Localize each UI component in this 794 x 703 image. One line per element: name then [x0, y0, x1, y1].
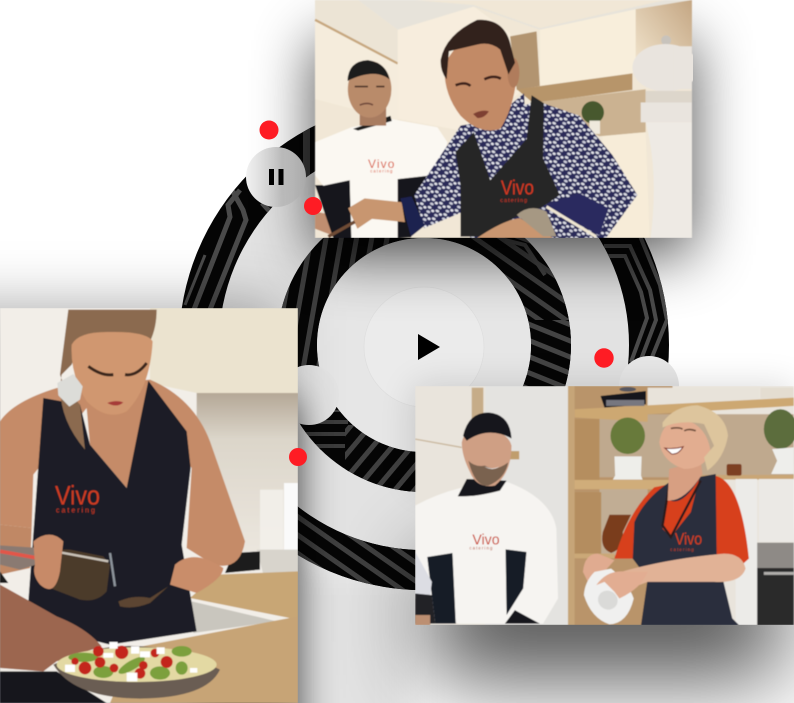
outer striped ring [182, 125, 669, 590]
concentric rings graphic [170, 100, 680, 600]
chef apron logo small: Vivo [368, 157, 395, 171]
man in patterned shirt [328, 20, 637, 238]
woman apron logo [670, 530, 702, 552]
chef logo: Vivo [472, 533, 500, 549]
brown jug [602, 515, 631, 553]
red dots [260, 120, 614, 466]
wooden shelving [568, 386, 794, 625]
woman apron logo: catering [670, 547, 695, 552]
jar with seeds [0, 545, 115, 600]
inner play circle [364, 287, 484, 407]
small circle lower left [279, 365, 339, 425]
photo: two chefs, man in patterned shirt [314, 0, 693, 238]
pause icon [269, 169, 284, 185]
kitchen roll and bowl [225, 483, 298, 576]
apron logo: catering [500, 198, 528, 204]
plant in white pot [610, 418, 645, 480]
inner disc [317, 238, 531, 452]
left hand [33, 535, 63, 589]
small brown cup [727, 464, 742, 476]
play icon [418, 334, 440, 360]
pot on shelf [601, 387, 646, 408]
pepper mill [632, 35, 699, 238]
apron logo: Vivo [55, 481, 100, 511]
chef logo: catering [469, 546, 493, 551]
pause button circle [246, 147, 306, 207]
helping hand [0, 585, 102, 671]
hair [60, 310, 157, 450]
quiche in tart tin [53, 642, 220, 699]
photo: woman sprinkling seeds on a quiche [0, 308, 298, 703]
photo: smiling chef and woman with bowl [415, 386, 794, 625]
earring [57, 374, 83, 407]
apron logo: Vivo [501, 176, 534, 199]
chef in background [315, 60, 447, 238]
smiling chef [415, 413, 558, 625]
plant on shelf [582, 101, 604, 134]
band between rings [219, 140, 629, 550]
small circle right [619, 356, 679, 416]
woman [0, 310, 245, 645]
white bowl [584, 569, 648, 624]
woman apron logo: Vivo [675, 530, 702, 549]
chef apron logo small: catering [370, 169, 393, 174]
plant right [764, 409, 794, 474]
apron logo: catering [56, 507, 97, 514]
white cabinets and oven [736, 479, 794, 625]
middle striped ring [282, 237, 571, 492]
laughing woman [583, 405, 749, 625]
right hand and spoon [118, 557, 223, 607]
